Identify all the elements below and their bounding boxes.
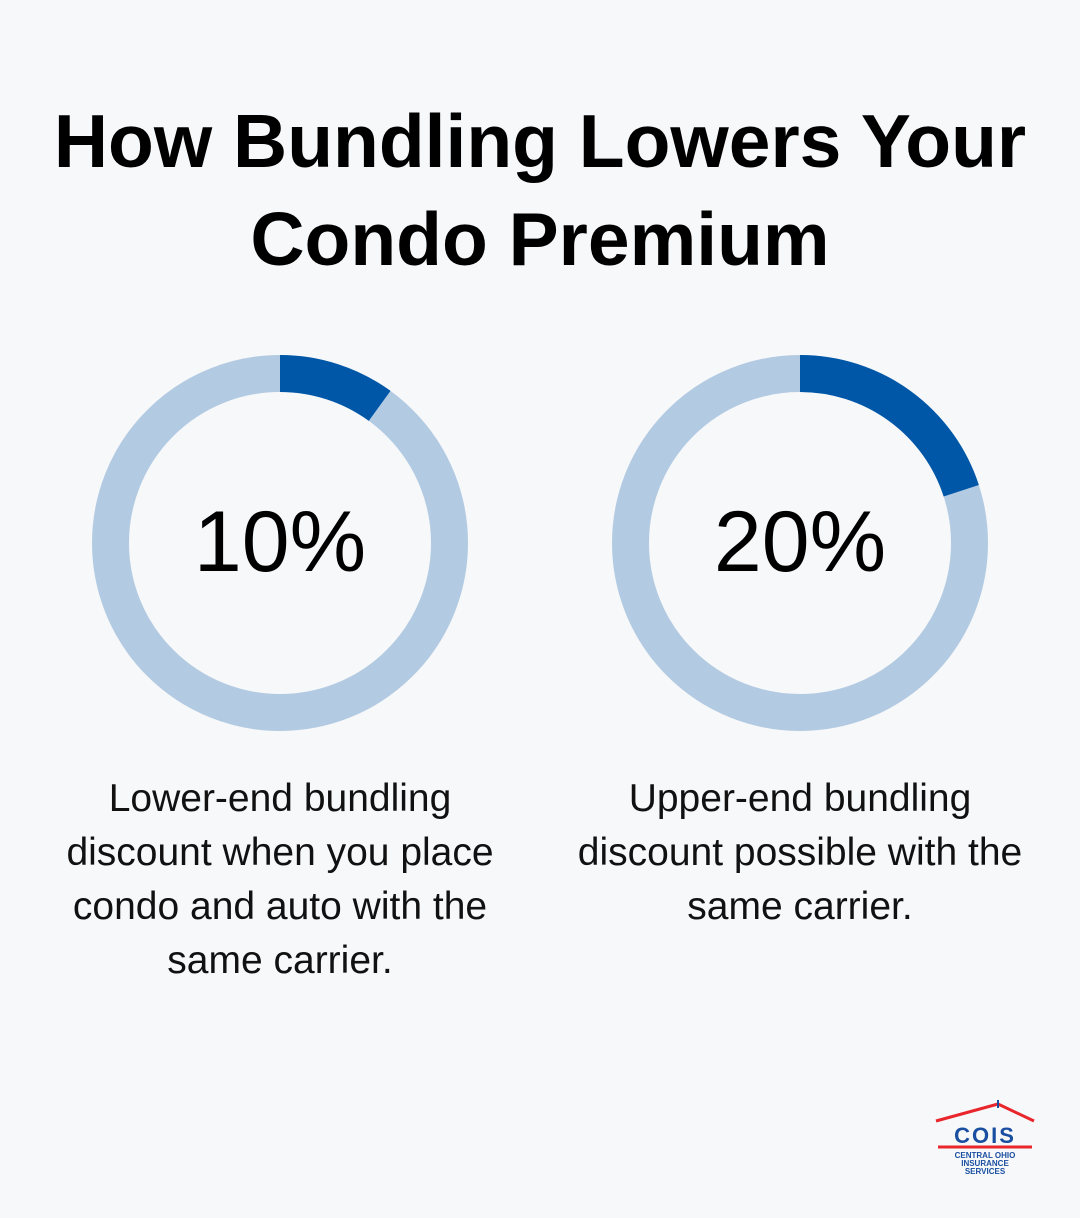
chart: 20% donut [612,355,988,731]
text: left description: discount when you place [66,831,494,874]
text: left description [66,777,494,982]
title [54,99,1026,281]
text: right description: Upper-end bundling [629,777,971,820]
chart: 10% donut [92,355,468,731]
logo: COIS: CENTRAL OHIO [955,1151,1015,1160]
text: left description: condo and auto with the [73,885,487,928]
logo: COIS: SERVICES [965,1167,1006,1176]
logo: COIS: INSURANCE [961,1159,1009,1168]
title: Condo Premium [250,197,830,281]
logo: COIS [936,1100,1035,1176]
chart: 10% donut: 10% [194,494,366,590]
logo: COIS: COIS [954,1123,1016,1148]
text: right description: discount possible with the [578,831,1022,874]
text: left description: same carrier. [167,939,393,982]
text: right description: same carrier. [687,885,913,928]
text: right description [578,777,1022,928]
text: left description: Lower-end bundling [109,777,451,820]
title: How Bundling Lowers Your [54,99,1026,183]
chart: 20% donut: 20% [714,494,886,590]
